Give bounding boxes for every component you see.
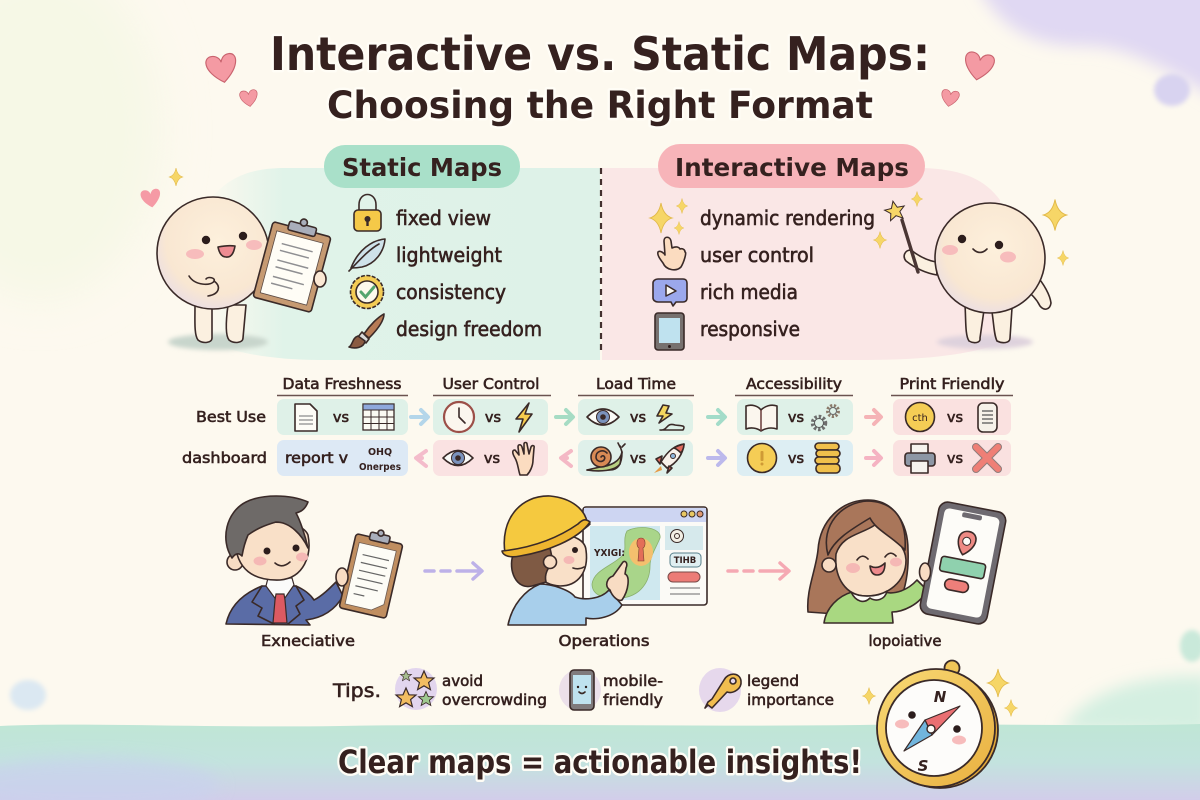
head: [528, 535, 586, 586]
cell row 2 column 3: vs: [630, 451, 646, 467]
sparkle small right: [1057, 250, 1069, 266]
band accent: [0, 757, 220, 800]
icon: feather: [349, 239, 385, 271]
arrow: executive to operations: [425, 563, 482, 579]
browser window: TIHB: [674, 556, 696, 566]
arrows row 1: [411, 410, 881, 424]
cell row 2 column 2: [433, 440, 548, 476]
icon: key: [699, 668, 741, 712]
browser window: YXIGI:: [593, 548, 625, 559]
character: interactive mascot with wand: [874, 192, 1067, 349]
persona: executive: [226, 496, 405, 625]
cell row 2 column 1: report v: [285, 449, 348, 467]
face: [836, 525, 906, 596]
table: comparison grid: [182, 375, 1013, 476]
persona: mobile user: [808, 500, 1007, 625]
hand pointer: [607, 561, 628, 600]
column header: Load Time: [578, 375, 694, 396]
persona: operations: [502, 496, 707, 625]
icon: phone face: [559, 669, 601, 711]
hair back: [808, 500, 908, 615]
cell row 2 column 4: [737, 440, 853, 476]
cell row 1 column 5: vs: [947, 410, 963, 426]
sparkles around compass: [863, 669, 1017, 716]
list: interactive features: [650, 198, 875, 350]
arrow: operations to third persona: [728, 563, 789, 579]
icon: paintbrush: [349, 314, 384, 348]
pill heading: static maps: [324, 145, 520, 188]
column header: Load Time: Load Time: [596, 375, 676, 393]
cell row 1 column 1: vs: [333, 410, 349, 426]
sparkles: [1043, 200, 1067, 230]
feature text: dynamic rendering: [700, 206, 875, 230]
list: static features: [349, 194, 542, 348]
cell row 2 column 3: [578, 440, 693, 476]
compass mascot: [877, 660, 998, 788]
tip text: legend: [747, 672, 799, 690]
tip text: friendly: [603, 691, 663, 709]
label: mobile user: lopoiative: [868, 632, 942, 650]
cell row 2 column 5: vs: [947, 451, 963, 467]
lapels: [252, 586, 304, 624]
cell row 1 column 3: [578, 399, 693, 435]
tip text: overcrowding: [442, 691, 547, 709]
feature text: design freedom: [396, 317, 542, 341]
icon: hearts left: [205, 52, 259, 108]
icon: tablet: [655, 313, 684, 350]
cell row 2 column 4: vs: [788, 451, 804, 467]
feature text: consistency: [396, 280, 506, 304]
icon: pointing hand: [658, 237, 686, 270]
pill heading: static maps: Static Maps: [342, 153, 502, 182]
label: executive: Exneciative: [261, 632, 355, 650]
feature text: responsive: [700, 317, 800, 341]
column header: Print Friendly: Print Friendly: [900, 375, 1004, 393]
compass mascot: N: [934, 688, 947, 706]
cell row 1 column 4: [737, 399, 853, 435]
cell row 1 column 3: vs: [630, 410, 646, 426]
character: static mascot with clipboard: [157, 197, 334, 350]
cell row 2 column 5: [893, 440, 1011, 476]
title: [270, 27, 930, 127]
cell row 1 column 5: cth: [912, 413, 928, 424]
cell row 1 column 4: vs: [788, 410, 804, 426]
cell row 1 column 2: vs: [485, 410, 501, 426]
icon: hearts right: [940, 51, 995, 108]
hard hat: [504, 496, 590, 553]
suit: [226, 582, 343, 625]
row label: dashboard: dashboard: [182, 449, 267, 467]
cell row 2 column 1: OHQ: [368, 447, 392, 458]
closing message: Clear maps = actionable insights!: [338, 743, 862, 781]
icon: check badge: [350, 276, 384, 308]
feature text: user control: [700, 243, 814, 267]
label: operations: Operations: [558, 632, 650, 650]
feature text: fixed view: [396, 206, 491, 230]
panel: interactive maps background: [602, 168, 1010, 360]
title: Choosing the Right Format: [327, 84, 873, 127]
arrows row 2: [416, 451, 881, 466]
phone: [919, 501, 1007, 625]
cell row 2 column 2: vs: [484, 451, 500, 467]
head: [227, 554, 243, 570]
icon: sparkles: [650, 198, 688, 234]
sweater: [824, 580, 927, 623]
title: Interactive vs. Static Maps:: [270, 27, 930, 81]
clipboard: [339, 525, 405, 618]
cell row 2 column 1: Onerpes: [359, 462, 401, 473]
sparkle and heart: static mascot: [140, 168, 183, 209]
tip text: importance: [747, 691, 834, 709]
cell row 1 column 5: [893, 399, 1011, 435]
feature text: lightweight: [396, 243, 502, 267]
row label: Best Use: Best Use: [196, 408, 266, 426]
column header: Accessibility: Accessibility: [746, 375, 842, 393]
wand: [874, 192, 923, 272]
clipboard: [253, 211, 334, 312]
pill heading: interactive maps: Interactive Maps: [675, 153, 909, 182]
collar: [851, 591, 887, 601]
cell row 1 column 1: [277, 399, 408, 435]
cell row 2 column 1: [277, 440, 408, 476]
pill heading: interactive maps: [658, 144, 925, 188]
panel: static maps background: [205, 168, 600, 360]
column header: User Control: User Control: [442, 375, 540, 393]
compass mascot: S: [918, 757, 928, 775]
tip text: mobile-: [603, 672, 663, 690]
tips label: Tips.: [332, 680, 381, 702]
feature text: rich media: [700, 280, 798, 304]
icon: stars: [395, 668, 437, 710]
worker body: [508, 584, 622, 625]
tips: [332, 668, 834, 712]
icon: video bubble: [653, 279, 687, 306]
divider dashed line: [600, 168, 602, 353]
browser window: [583, 507, 707, 605]
cell row 1 column 2: [433, 399, 548, 435]
icon: padlock: [354, 194, 381, 231]
bottom band: [0, 724, 1200, 800]
tip text: avoid: [442, 672, 483, 690]
column header: Data Freshness: Data Freshness: [282, 375, 402, 393]
